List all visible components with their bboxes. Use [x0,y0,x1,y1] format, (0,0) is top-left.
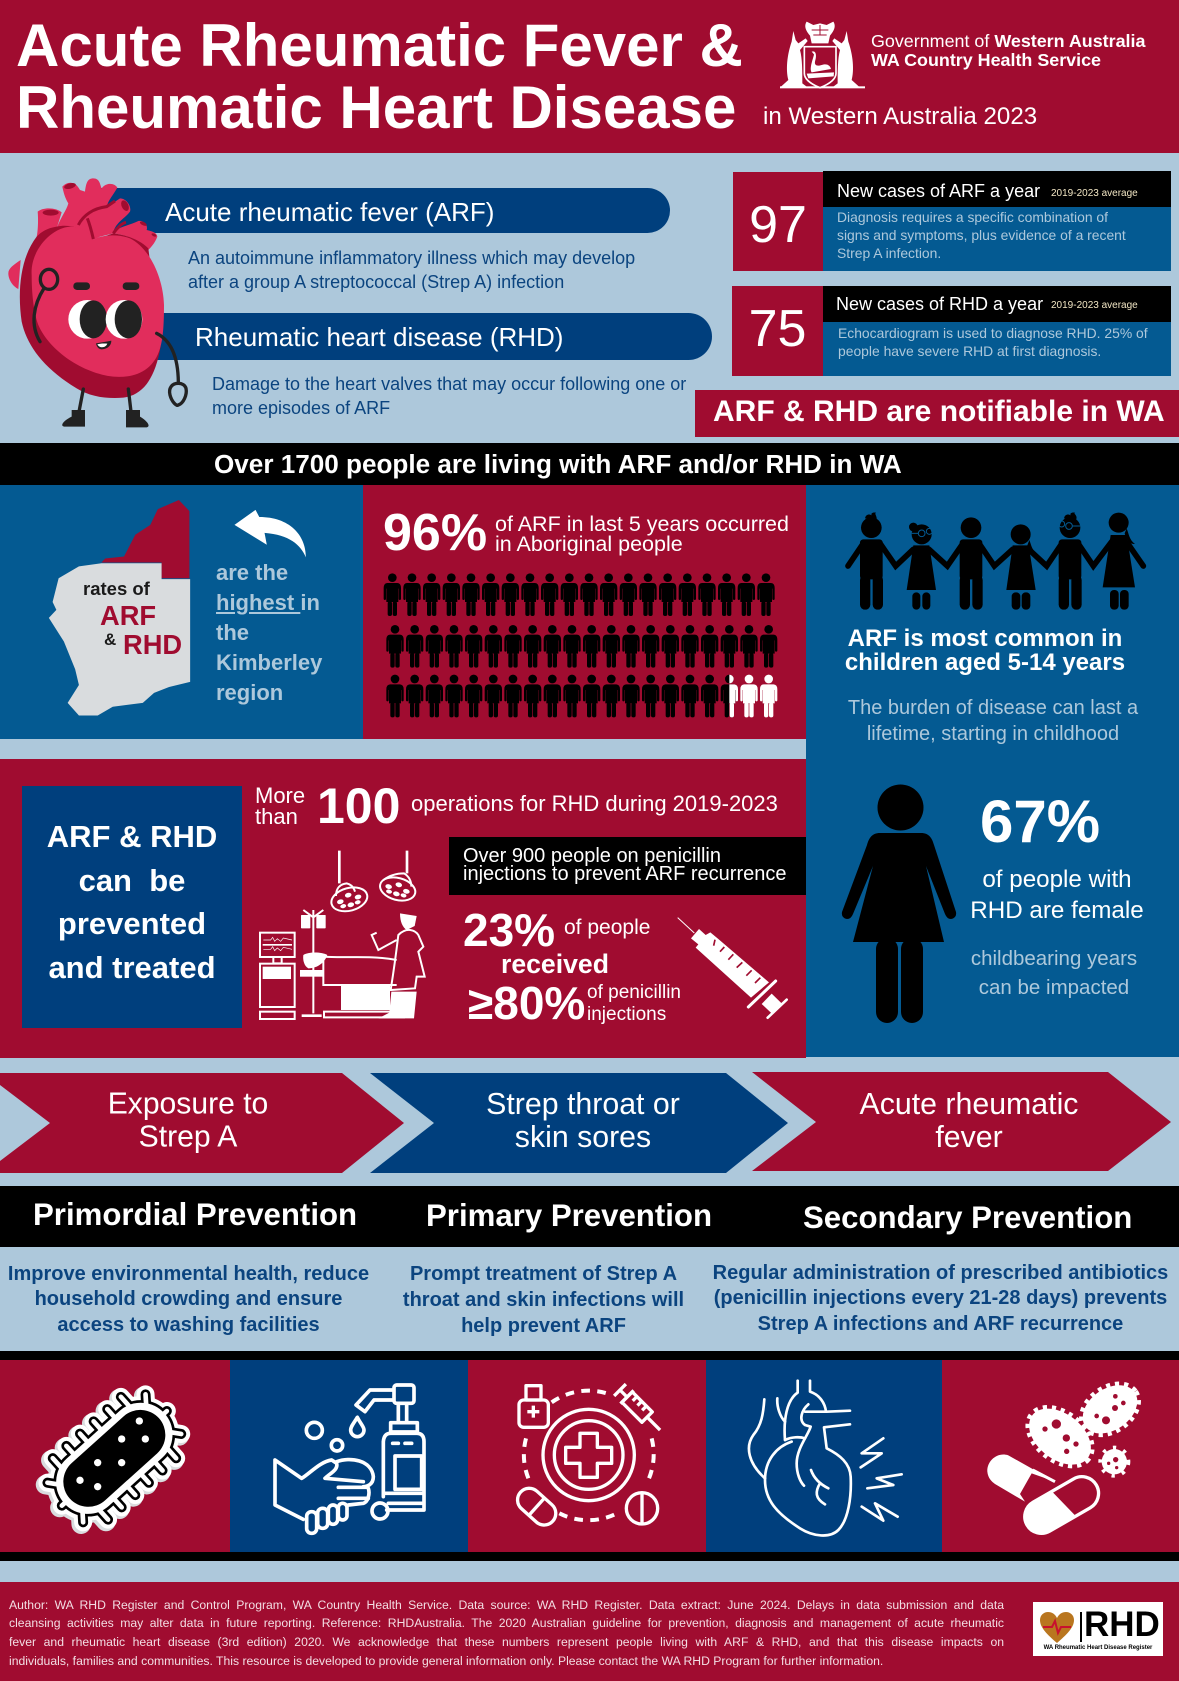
stat text: in Aboriginal people [495,532,683,556]
card text: ARF: signs and symptoms, plus evidence of a recent [837,227,1126,243]
card heading: RHD: 2019-2023 average [1051,300,1138,311]
text: highest in Kimberley: region [216,680,283,705]
callout: penicillin injections [449,837,806,895]
pill text: ARF: Acute rheumatic fever (ARF) [165,197,494,227]
text: more than: than [255,804,298,828]
text: childbearing years: can be impacted [979,976,1129,998]
subtitle: in Western Australia 2023 [763,103,1037,130]
text: highest in Kimberley: Kimberley [216,650,322,675]
stat: 80% or more: ≥80% [468,977,585,1029]
panel: bacteria icon [0,1360,230,1552]
icon: washing hands with soap [273,1383,426,1536]
footer text: author and references: cleansing activities may alter data in future reporting. Reference: RHDAustralia. The 2020 Australian guideline for prevention, diagnosis and management of acute rheumatic [9,1616,1004,1630]
card: ARF new cases [733,171,1171,271]
government text: WA Country Health Service [871,50,1101,70]
text: secondary prevention: Regular administration of prescribed antibiotics [713,1262,1168,1284]
stat text: of people: of people [564,916,650,939]
icon: logo heart [1040,1612,1074,1643]
panel: definitions and annual case numbers [8,171,1179,437]
text: RHD definition: Damage to the heart valves that may occur following one or [212,374,686,394]
icon: medical cross with medicines [516,1382,662,1527]
chevron: acute rheumatic fever: Acute rheumatic [860,1088,1078,1121]
panel: 96 percent Aboriginal people [363,485,806,739]
text: primordial prevention: household crowding and ensure [35,1288,342,1310]
stat text [970,866,1144,924]
card text: RHD: Echocardiogram is used to diagnose RHD. 25% of [838,324,1148,340]
footer [0,1582,1179,1681]
banner: prevention headings [0,1186,1179,1247]
text: RHD definition [212,374,686,418]
logo text: RHD: RHD [1084,1605,1160,1644]
text: secondary prevention [713,1262,1168,1335]
text: childbearing years [971,947,1137,998]
text: burden of disease: lifetime, starting in childhood [867,723,1119,745]
panel: antibiotics icon [942,1360,1179,1552]
map label: RHD: RHD [123,629,182,660]
card heading: ARF [823,171,1171,207]
card heading: RHD: New cases of RHD a year [836,294,1043,314]
title: Rheumatic Heart Disease [16,74,736,141]
logo caption: WA Rheumatic Heart Disease Register [1044,1645,1152,1651]
stat: 96%: 96% [383,504,487,562]
chevron: exposure to Strep A [0,1073,404,1173]
stat: 75: 75 [749,300,806,358]
footer text: author and references [9,1598,1004,1668]
footer text: author and references: individuals, families and communities. This resource is developed to provide general information only. Please contact the WA RHD Program for further information. [9,1654,883,1668]
panel: Kimberley map [0,485,363,739]
card heading: ARF: New cases of ARF a year [837,181,1040,201]
card text: ARF: Strep A infection. [837,245,941,261]
text: primary prevention [403,1263,684,1337]
text: secondary prevention: Strep A infections and ARF recurrence [758,1313,1123,1335]
chevron: exposure to Strep A: Exposure to [108,1088,268,1120]
icon: woman figure [842,784,956,1023]
icon: operating theatre [259,850,426,1020]
heading: most common in children [845,624,1125,676]
map label: ARF: ARF [100,600,156,631]
text: ARF definition: after a group A streptococcal (Strep A) infection [188,272,564,292]
map label: ampersand: & [104,630,116,649]
panel: heart icon [706,1360,942,1552]
stat: 67%: 67% [980,788,1100,855]
text: primary prevention: Prompt treatment of Strep A [410,1263,677,1285]
logo divider [1080,1612,1082,1642]
panel: hand washing icon [230,1360,468,1552]
map label: rates of: rates of [83,578,150,599]
stat text: received: received [501,949,609,979]
pill heading: RHD [100,313,712,360]
text: more than: More [255,782,305,808]
card text: RHD [823,322,1171,376]
title: Acute Rheumatic Fever & [16,12,743,79]
text: primordial prevention: access to washing facilities [57,1314,320,1336]
heading: primordial prevention: Primordial Prevention [33,1197,357,1232]
government text [871,30,1146,70]
text: highest in Kimberley: highest in [216,590,320,615]
icon: children holding hands [845,512,1146,610]
stat: 97: 97 [749,196,807,254]
text: RHD definition: more episodes of ARF [212,398,390,418]
banner text: Over 1700 people are living with ARF and/or RHD in WA [214,449,902,479]
icon: heart mascot [8,178,188,428]
footer text: author and references: Author: WA RHD Register and Control Program, WA Country Health Service. Data source: WA RHD Register. Data extract: June 2024. Delays in data submission and data [9,1598,1004,1612]
text: highest in Kimberley: are the [216,560,288,585]
callout: penicillin injections: Over 900 people on penicillin [463,844,721,866]
pill text: RHD: Rheumatic heart disease (RHD) [195,322,563,352]
stat text: of penicillin injections [587,982,681,1025]
chevron: acute rheumatic fever: fever [935,1121,1003,1154]
callout: can be prevented and treated: can be [79,863,185,898]
pill heading: ARF [100,188,670,233]
logo: WA RHD register [1033,1602,1163,1656]
heading: secondary prevention: Secondary Prevention [803,1200,1132,1235]
header banner [0,0,1179,153]
callout: can be prevented and treated: prevented [58,906,206,941]
heading: primary prevention: Primary Prevention [426,1198,712,1233]
stat text [495,512,789,556]
callout: penicillin injections: injections to prevent ARF recurrence [463,863,786,885]
text: ARF definition: An autoimmune inflammatory illness which may develop [188,248,635,268]
stat text: RHD are female [970,896,1144,924]
panel: prevention and treatment [0,759,806,1058]
callout: can be prevented and treated [22,786,242,1028]
text: primordial prevention: Improve environmental health, reduce [8,1262,369,1284]
callout: notifiable [695,390,1179,437]
panel: medical care icon [468,1360,706,1552]
text: childbearing years: childbearing years [971,947,1137,970]
card heading: RHD [823,286,1171,322]
chevron: exposure to Strep A: Strep A [139,1120,238,1154]
icon: WA government crest [780,22,865,89]
card heading: ARF: 2019-2023 average [1051,188,1138,199]
panel: icon row [0,1351,1179,1561]
text: burden of disease: The burden of disease can last a [848,696,1138,718]
icon: bacteria [36,1385,190,1534]
text: primary prevention: throat and skin infections will [403,1289,684,1311]
stat: 100: 100 [317,778,400,834]
stat text: of people with [982,866,1132,893]
text: highest in Kimberley: the [216,620,249,645]
map of Western Australia with arrow [48,500,306,716]
card text: ARF [823,207,1171,271]
text: highest in Kimberley [216,560,322,705]
callout: can be prevented and treated: and treated [48,950,216,985]
card: RHD new cases [732,286,1171,376]
text: primary prevention: help prevent ARF [461,1315,626,1337]
heading: most common in children: children aged 5-14 years [845,649,1125,676]
text: ARF definition [188,248,635,292]
stat: 23%: 23% [463,904,555,956]
banner: people living with ARF/RHD [0,443,1179,485]
stat: 75 [732,286,823,376]
heading: most common in children: ARF is most common in [848,624,1122,652]
icon: anatomical heart with pain bolts [748,1379,903,1537]
government text: Government of Western Australia [871,30,1145,50]
panel: disease progression chevrons [0,1072,1171,1173]
stat text: operations: operations for RHD during 2019-2023 [411,791,778,816]
stat text: of penicillin injections: injections [587,1004,666,1025]
text: more than [255,782,305,828]
card text: RHD: people have severe RHD at first diagnosis. [838,343,1101,359]
card text: ARF: Diagnosis requires a specific combination of [837,209,1108,225]
stat: 97 [733,172,823,271]
text: primordial prevention [8,1262,369,1336]
text: burden of disease [848,696,1138,745]
title [16,12,743,141]
footer text: author and references: fever and rheumatic heart disease (3rd edition) 2020. We acknowledge that these numbers represent people living with ARF & RHD, and that this disease impacts on [9,1635,1004,1649]
text: secondary prevention: (penicillin injections every 21-28 days) prevents [714,1287,1167,1309]
panel: children and females [806,485,1179,1057]
icon: syringe [677,917,788,1020]
icon: capsules and germs [987,1382,1141,1535]
stat text: of penicillin injections: of penicillin [587,982,681,1003]
chevron: strep throat or skin sores [370,1073,788,1173]
chevron: strep throat or skin sores: skin sores [515,1121,651,1154]
chevron: strep throat or skin sores: Strep throat or [486,1088,680,1121]
callout: can be prevented and treated: ARF & RHD [47,819,217,854]
callout: notifiable: ARF & RHD are notifiable in WA [713,395,1165,428]
chevron: acute rheumatic fever [752,1072,1171,1171]
stat text: of ARF in last 5 years occurred [495,512,789,536]
pictogram: 60 people [384,573,778,718]
